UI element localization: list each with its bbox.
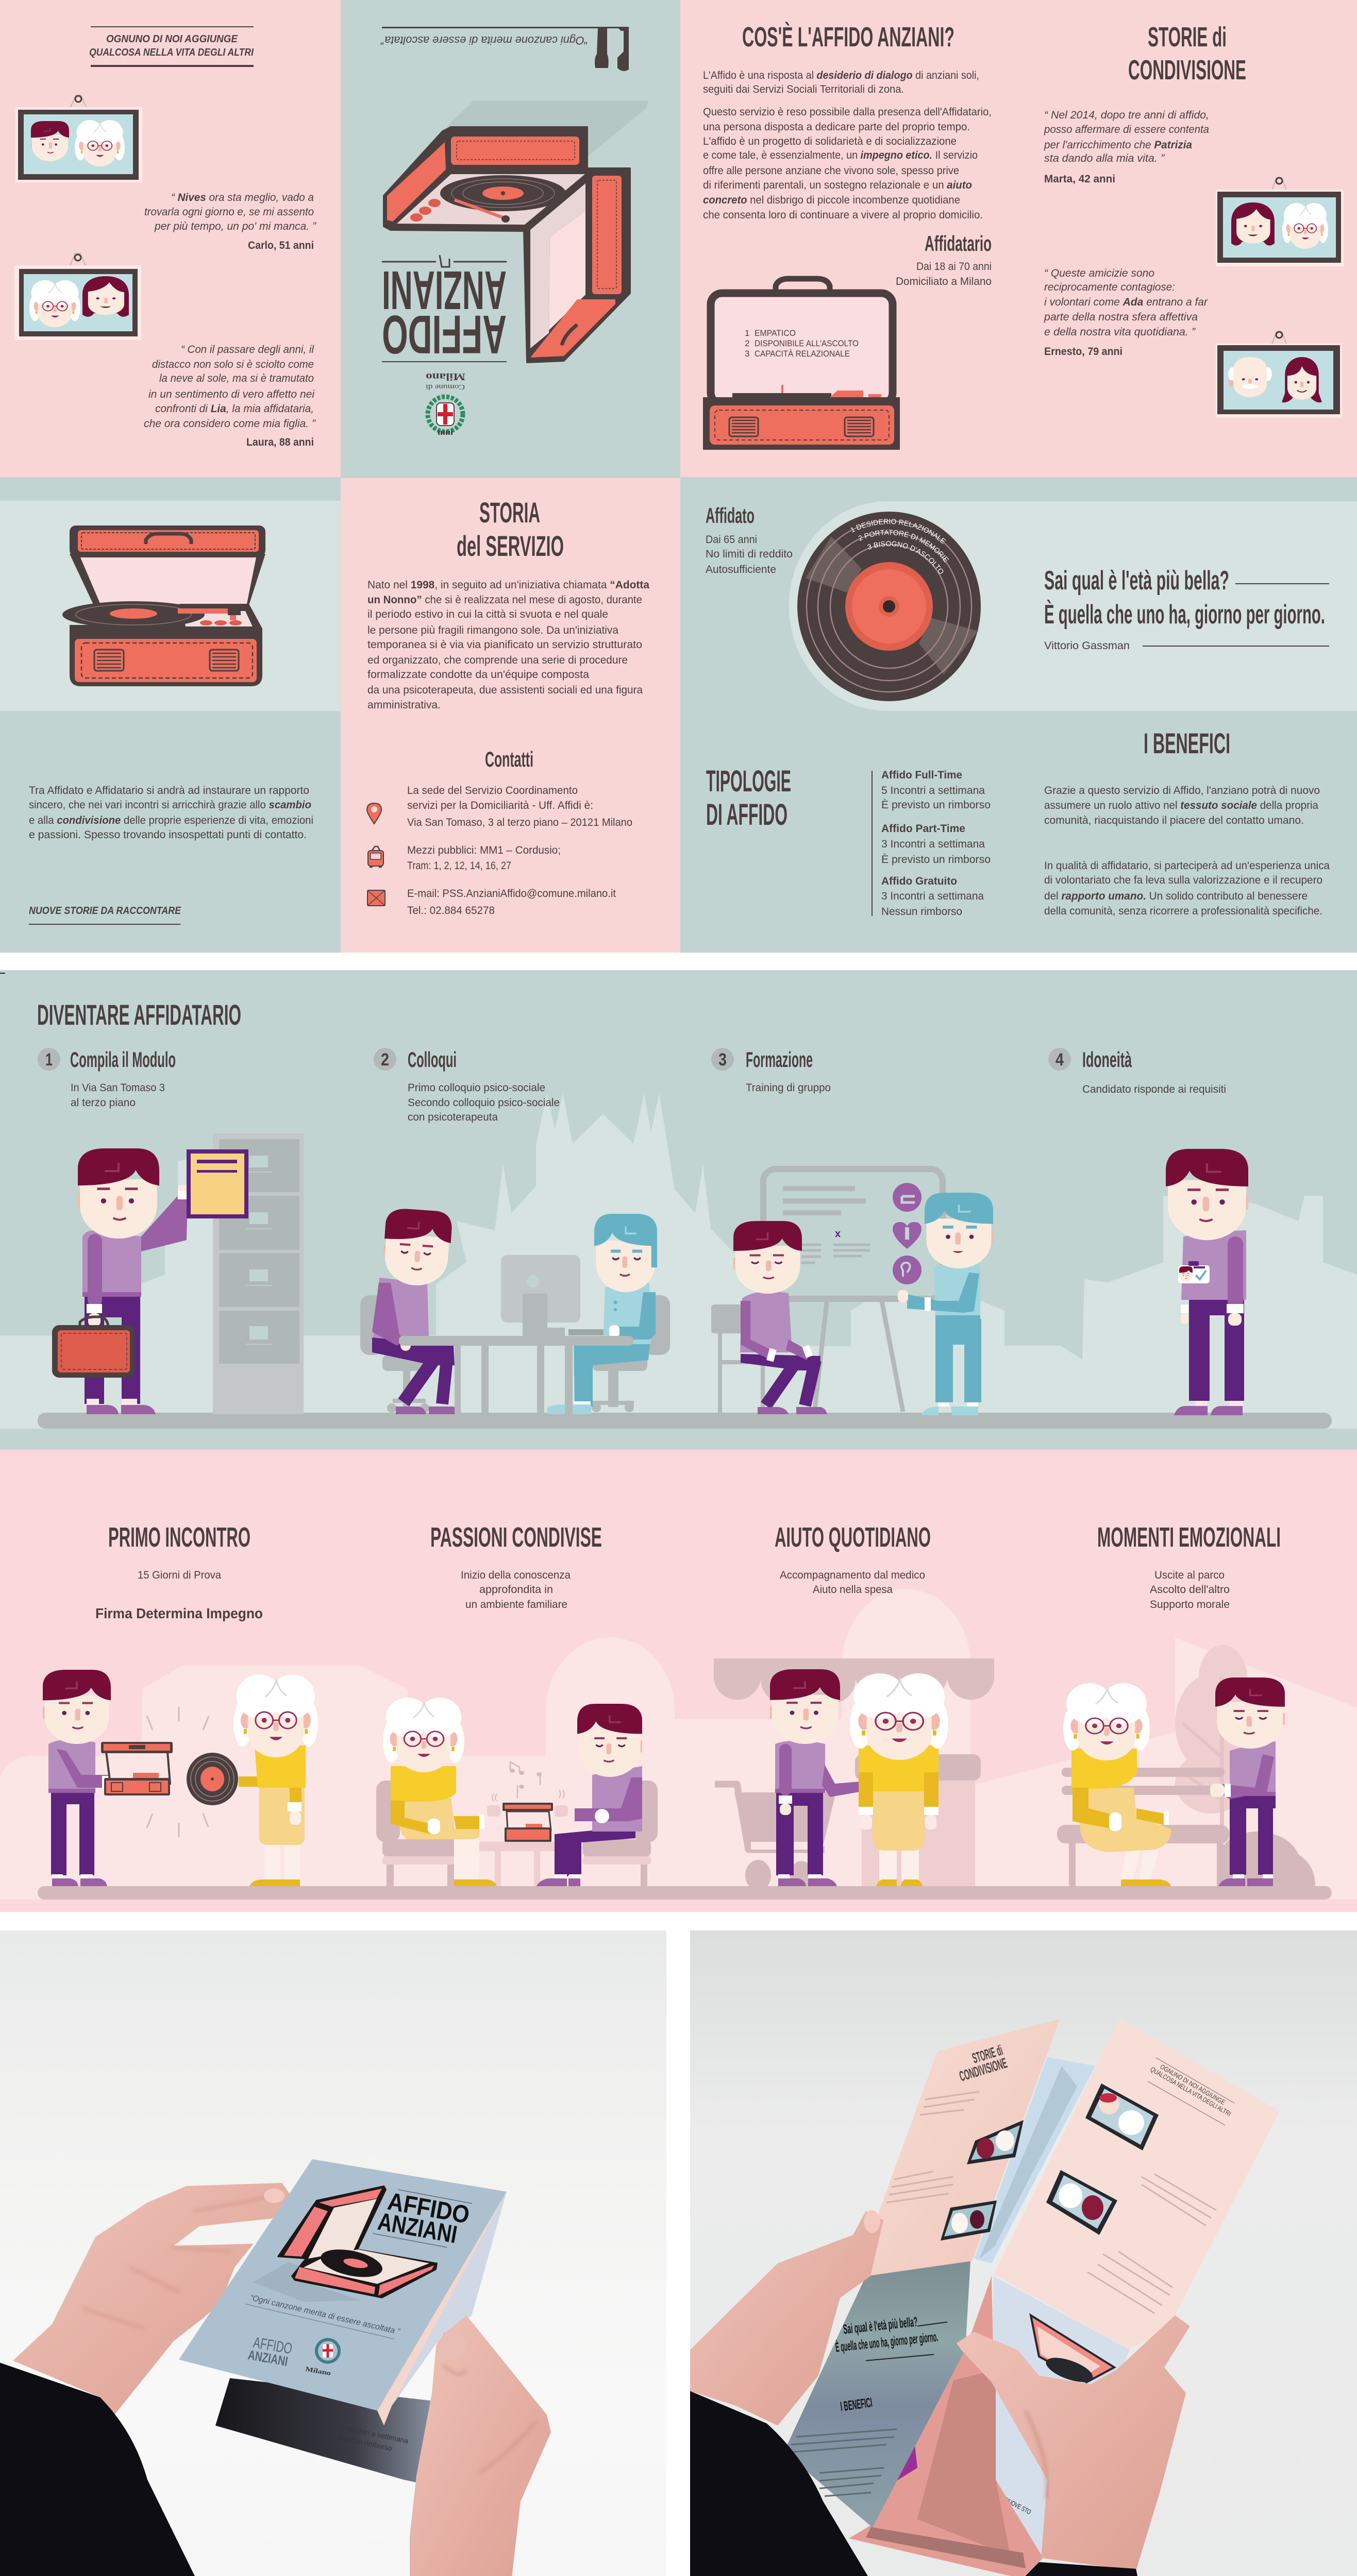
step 1 label — [38, 1047, 176, 1109]
figure on page — [876, 2421, 917, 2494]
block: affidato: Dai 65 anni — [706, 534, 757, 546]
cover shadow — [253, 2262, 361, 2302]
brochure right page — [994, 2019, 1280, 2349]
heading: ognuno di noi: OGNUNO DI NOI AGGIUNGE — [106, 33, 238, 45]
panel: abbinamento scenes — [0, 1450, 1357, 1912]
step 4 label: Idoneità — [1082, 1047, 1132, 1072]
cover logos: Milano — [305, 2365, 331, 2377]
text block: definition: L'Affido è una risposta al desiderio di dialogo di anziani soli, — [703, 70, 979, 81]
panel: row two right — [680, 479, 1357, 953]
text block: definition — [703, 70, 992, 221]
filing cabinet — [213, 1133, 304, 1414]
panel: testimonials left — [0, 0, 341, 477]
quote: Gassman: Vittorio Gassman — [1044, 640, 1130, 652]
icon: heart — [893, 1222, 922, 1249]
step 1 label: Compila il Modulo — [70, 1047, 176, 1072]
cover title: AFFIDO — [382, 304, 507, 365]
cover logos — [247, 2334, 339, 2377]
heading: cos'è: COS'È L'AFFIDO ANZIANI? — [742, 22, 954, 53]
text block: rapporto: e passioni. Spesso trovando insospettati punti di contatto. — [29, 829, 307, 841]
burst lines — [147, 1707, 209, 1837]
table top — [399, 1336, 633, 1414]
cover title: ANZIANI — [382, 260, 507, 320]
step 2 label: Primo colloquio psico-sociale — [408, 1082, 545, 1094]
text block: definition: concreto nel disbrigo di piccole incombenze quotidiane — [703, 194, 960, 206]
figure: man with suitcase and form — [52, 1148, 246, 1414]
quote: Marta: posso affermare di essere contenta — [1044, 124, 1209, 135]
heading group: aiuto: AIUTO QUOTIDIANO — [775, 1522, 931, 1553]
contact: address: servizi per la Domiciliarità - Uff. Affidi è: — [407, 800, 593, 811]
ground band on pink page — [866, 2527, 1026, 2568]
lower right bluish page — [987, 2276, 1130, 2558]
text block: benefici: Grazie a questo servizio di Affido, l'anziano potrà di nuovo — [1044, 785, 1320, 796]
text block: benefici: comunità, riacquistando il piacere del contatto umano. — [1044, 815, 1304, 826]
text block: definition: una persona disposta a dedicare parte del proprio tempo. — [703, 121, 970, 133]
step 2 label: 2 — [381, 1050, 389, 1070]
step 4 label: Candidato risponde ai requisiti — [1082, 1083, 1226, 1095]
panel: cover — [341, 0, 680, 477]
armchair left — [376, 1781, 460, 1886]
text block: history: formalizzate condotte da un'équipe composta — [367, 669, 589, 681]
list: types of affido: 5 Incontri a settimana — [881, 785, 985, 796]
quote: Laura: la neve al sole, ma si è tramutato — [159, 372, 314, 384]
text block: rapporto — [29, 785, 313, 841]
heading: benefici: I BENEFICI — [1144, 727, 1230, 759]
quote: Ernesto: i volontari come Ada entrano a far — [1044, 296, 1208, 308]
armchair right — [582, 1781, 658, 1886]
quote: Ernesto: parte della nostra sfera affettiva — [1044, 311, 1198, 323]
cover logos: ANZIANI — [247, 2347, 289, 2369]
quote: Marta — [1044, 109, 1209, 185]
photo: open brochure in hands: I BENEFICI — [840, 2395, 873, 2414]
heading: storia: STORIA — [479, 496, 540, 529]
heading: tipologie: TIPOLOGIE — [706, 765, 791, 798]
cover title: ANZIANI — [376, 2208, 459, 2249]
text block: history: un Nonno” che si è realizzata nel mese di agosto, durante — [367, 594, 642, 606]
right page heading: OGNUNO DI NOI AGGIUNGE — [1159, 2063, 1227, 2106]
quote: Laura: distacco non solo si è sciolto come — [152, 359, 314, 370]
counter — [855, 1754, 981, 1781]
quote: Ernesto: “ Queste amicizie sono — [1044, 267, 1154, 279]
heading: storie: CONDIVISIONE — [1128, 55, 1246, 86]
right hand — [957, 2315, 1190, 2571]
heading: ognuno di noi: QUALCOSA NELLA VITA DEGLI ALTRI — [89, 47, 254, 58]
heading group: passioni: PASSIONI CONDIVISE — [430, 1522, 602, 1553]
icon: cable plug — [595, 28, 629, 71]
shopping cart — [715, 1784, 836, 1891]
portrait frame: woman and old woman — [1216, 178, 1344, 266]
open record player illustration — [62, 526, 265, 686]
logo: Comune di Milano: Milano — [426, 371, 465, 382]
text block: benefici: di volontariato che fa leva sulla valorizzazione e il recupero — [1044, 874, 1322, 886]
text block: history — [367, 579, 649, 711]
step 4 label: 4 — [1056, 1050, 1064, 1070]
quote: Laura: Laura, 88 anni — [246, 436, 314, 448]
quote: Nives: Carlo, 51 anni — [248, 240, 314, 251]
heading: storie — [1128, 22, 1246, 86]
sleeves — [690, 2391, 1142, 2576]
ground — [38, 1886, 1332, 1900]
left hand — [690, 2210, 883, 2426]
text block: rapporto: Tra Affidato e Affidatario si andrà ad instaurare un rapporto — [29, 785, 309, 796]
block: affidatario: Dai 18 ai 70 anni — [916, 261, 992, 273]
heading group: passioni — [430, 1522, 602, 1611]
icon: tram — [368, 846, 383, 867]
right page frames — [1046, 2083, 1159, 2235]
left page heading: STORIE di — [970, 2042, 1004, 2066]
figure: old woman seated — [383, 1698, 497, 1886]
whiteboard — [763, 1169, 943, 1413]
list: requirements: CAPACITÀ RELAZIONALE — [755, 349, 850, 359]
contact: transport: Tram: 1, 2, 12, 14, 16, 27 — [407, 860, 511, 872]
quote: Marta: sta dando alla mia vita. ” — [1044, 152, 1165, 164]
quote: Laura: confronti di Lia, la mia affidataria, — [155, 403, 314, 415]
heading group: passioni: approfondita in — [479, 1584, 553, 1596]
left page heading — [958, 2042, 1009, 2084]
heading: storia: del SERVIZIO — [457, 530, 564, 562]
left hand — [13, 2183, 290, 2417]
park bench — [1057, 1768, 1229, 1886]
portrait frame: man and old woman — [15, 95, 142, 182]
quote: Laura: che ora considero come mia figlia. ” — [144, 418, 316, 430]
heading: tipologie: DI AFFIDO — [706, 798, 788, 832]
heading: ognuno di noi — [89, 26, 254, 67]
lower tagline fragment: NUOVE STO — [1004, 2496, 1032, 2516]
chair right — [592, 1295, 670, 1412]
figure: approved candidate with badge — [1166, 1149, 1250, 1415]
figure: candidate seated at table — [372, 1207, 460, 1414]
separator strip — [0, 477, 1357, 479]
bush — [1220, 1832, 1315, 1886]
scene: primo incontro — [41, 1670, 318, 1886]
shop column — [862, 1778, 975, 1886]
scene: passioni condivise — [376, 1698, 658, 1886]
teal fold text lines — [789, 2429, 897, 2496]
contact: transport — [407, 844, 561, 872]
tree — [1175, 1645, 1247, 1832]
right page text lines — [1087, 2174, 1216, 2313]
text block: rapporto: sincero, che nei vari incontri si arricchirà grazie allo scambio — [29, 799, 311, 811]
lower record player — [1031, 2315, 1114, 2387]
heading group: passioni: Inizio della conoscenza — [461, 1569, 571, 1581]
step 3 label — [711, 1047, 831, 1094]
block: affidatario: Domiciliato a Milano — [896, 276, 992, 287]
sleeve — [0, 2363, 204, 2576]
cover quote upside down: “Ogni canzone merita di essere ascoltata” — [380, 34, 588, 47]
list: types of affido: 3 Incontri a settimana — [881, 838, 985, 850]
step 2 label — [374, 1047, 560, 1123]
mini record player 2 — [502, 1803, 553, 1842]
text block: definition: L'affido è un progetto di solidarietà e di socializzazione — [703, 135, 957, 147]
quote: Nives — [144, 192, 316, 251]
text block: benefici: del rapporto umano. Un solido contributo al benessere — [1044, 890, 1308, 902]
step 1 label: al terzo piano — [71, 1097, 136, 1109]
contact: address — [407, 785, 632, 828]
quote: Ernesto: Ernesto, 79 anni — [1044, 346, 1123, 358]
heading: storia — [457, 496, 564, 562]
text block: definition: Questo servizio è reso possibile dalla presenza dell'Affidatario, — [703, 106, 992, 118]
figure: old woman standing — [233, 1674, 318, 1886]
heading group: aiuto: Aiuto nella spesa — [813, 1584, 893, 1596]
awning — [714, 1658, 994, 1703]
list: types of affido: È previsto un rimborso — [881, 799, 991, 811]
list: types of affido: Affido Part-Time — [881, 823, 965, 835]
text block: benefici: In qualità di affidatario, si parteciperà ad un'esperienza unica — [1044, 860, 1330, 872]
panel: row two left — [0, 478, 341, 953]
scene: momenti emozionali — [1057, 1645, 1315, 1886]
brochure cover — [179, 2159, 507, 2411]
step 4 label — [1048, 1047, 1226, 1095]
heading group: momenti: Uscite al parco — [1154, 1569, 1225, 1581]
step 3 label: Training di gruppo — [746, 1082, 831, 1094]
left page text lines — [886, 2092, 979, 2202]
background silhouettes — [0, 1589, 1357, 1900]
quote: Marta: “ Nel 2014, dopo tre anni di affido, — [1044, 109, 1209, 121]
step 3 label: 3 — [718, 1050, 727, 1070]
list: requirements: DISPONIBILE ALL'ASCOLTO — [755, 338, 859, 348]
text block: benefici: assumere un ruolo attivo nel tessuto sociale della propria — [1044, 800, 1318, 811]
heading group: passioni: un ambiente familiare — [465, 1599, 567, 1611]
step 1 label: 1 — [45, 1050, 53, 1070]
quote: Ernesto — [1044, 267, 1208, 358]
panel: storia del servizio — [341, 478, 680, 953]
icon: at sign — [893, 1183, 922, 1212]
quote: Marta: per l'arricchimento che Patrizia — [1044, 139, 1192, 151]
text block: rapporto: e alla condivisione delle proprie esperienze di vita, emozioni — [29, 815, 313, 826]
block: affidato — [706, 503, 793, 575]
quote: Nives: trovarla ogni giorno e, se mi assento — [144, 206, 314, 218]
list: types of affido: Affido Full-Time — [881, 769, 962, 781]
quote: Ernesto: e della nostra vita quotidiana. ” — [1044, 326, 1196, 338]
text block: definition: seguiti dai Servizi Sociali Territoriali di zona. — [703, 83, 904, 95]
figure: seated trainee — [732, 1221, 827, 1414]
step 1 label: In Via San Tomaso 3 — [71, 1082, 165, 1094]
step 2 label: Secondo colloquio psico-sociale — [408, 1097, 560, 1109]
cover quote upside down — [380, 27, 629, 47]
contact: transport: Mezzi pubblici: MM1 – Cordusio; — [407, 844, 561, 856]
contact: email: E-mail: PSS.AnzianiAffido@comune.milano.it — [407, 888, 616, 900]
list: requirements: EMPATICO — [755, 328, 796, 338]
text block: definition: che consenta loro di continuare a vivere al proprio domicilio. — [703, 209, 983, 221]
brochure centre fold — [974, 2057, 1095, 2263]
mini record player — [101, 1742, 173, 1795]
block: affidatario — [896, 231, 992, 287]
chair at whiteboard — [711, 1304, 765, 1413]
quote: Nives: per più tempo, un po' mi manca. ” — [154, 221, 316, 232]
heading group: primo incontro: PRIMO INCONTRO — [108, 1522, 250, 1553]
figure: man seated — [537, 1704, 644, 1886]
panel: diventare affidatario — [0, 970, 1357, 1450]
cover title — [373, 2188, 472, 2249]
heading group: aiuto — [775, 1522, 931, 1596]
text block: history: da una psicoterapeuta, due assistenti sociali ed una figura — [367, 684, 643, 696]
left teal fold — [784, 2261, 970, 2528]
contact: email: Tel.: 02.884 65278 — [407, 905, 495, 917]
icon: ear — [893, 1256, 922, 1284]
text block: definition: e come tale, è essenzialmente, un impegno etico. Il servizio — [703, 149, 978, 161]
lower pink page — [849, 2276, 1043, 2576]
panel: what is affido — [680, 0, 1357, 477]
heading group: momenti — [1097, 1522, 1281, 1611]
text block: history: Nato nel 1998, in seguito ad un'iniziativa chiamata “Adotta — [367, 579, 649, 591]
cover logos: AFFIDO — [252, 2334, 293, 2358]
heading group: primo incontro: Firma Determina Impegno — [95, 1605, 263, 1621]
text block: history: ed organizzato, che comprende una serie di procedure — [367, 654, 628, 666]
ground — [38, 1413, 1332, 1429]
record player illustration — [384, 127, 630, 362]
teal fold quote — [834, 2314, 947, 2361]
vinyl curved text 3: 3 BISOGNO D'ASCOLTO — [867, 541, 943, 574]
photo: open brochure in hands: È quella che uno ha, giorno per giorno. — [834, 2329, 939, 2355]
teal fold quote: Sai qual è l'età più bella? — [842, 2314, 918, 2337]
figure: man with player — [41, 1670, 116, 1886]
brochure inner text: 3 Incontri a settimana — [340, 2422, 409, 2445]
text block: definition: offre alle persone anziane che vivono sole, spesso prive — [703, 165, 959, 177]
monitor and table — [501, 1255, 610, 1336]
vinyl curved text: 1 DESIDERIO RELAZIONALE — [850, 519, 946, 544]
quote: Nives: “ Nives ora sta meglio, vado a — [171, 192, 314, 204]
form paper — [189, 1151, 246, 1216]
vinyl record with labels — [797, 512, 981, 701]
list: types of affido — [872, 769, 991, 918]
pink fold edge — [377, 2192, 507, 2426]
quote: Marta: Marta, 42 anni — [1044, 173, 1115, 185]
cover record player — [278, 2186, 437, 2298]
list: types of affido: È previsto un rimborso — [881, 854, 991, 866]
quote: Laura: “ Con il passare degli anni, il — [181, 344, 314, 355]
contact: address: La sede del Servizio Coordinamento — [407, 785, 578, 796]
block: affidato: Affidato — [706, 503, 755, 528]
text block: benefici: della comunità, senza ricorrere a professionalità specifiche. — [1044, 905, 1322, 917]
brochure back sheet — [215, 2315, 466, 2488]
heading: diventare: DIVENTARE AFFIDATARIO — [37, 998, 241, 1031]
logo: Comune di Milano: Comune di — [426, 383, 465, 391]
left page frames — [941, 2120, 1024, 2241]
chair left — [360, 1295, 434, 1413]
contact: email — [407, 888, 616, 917]
badge — [1178, 1261, 1210, 1283]
quote: Laura: in un sentimento di vero affetto nei — [148, 388, 315, 400]
whiteboard: x — [835, 1228, 841, 1240]
step 3 label: Formazione — [746, 1047, 813, 1072]
heading group: aiuto: Accompagnamento dal medico — [780, 1569, 925, 1581]
block: affidatario: Affidatario — [925, 231, 992, 256]
list: requirements: 2 — [745, 338, 749, 348]
text block: history: amministrativa. — [367, 699, 441, 711]
text block: history: le persone più fragili rimangono sole. Da un'iniziativa — [367, 624, 618, 636]
block: affidato: No limiti di reddito — [706, 548, 793, 560]
list: requirements: 3 — [745, 349, 749, 359]
list: types of affido: Affido Gratuito — [881, 875, 957, 887]
contact: address: Via San Tomaso, 3 al terzo piano – 20121 Milano — [407, 817, 632, 828]
photo: open brochure in hands — [690, 1930, 1357, 2576]
figure: old woman standing — [850, 1673, 948, 1886]
table with cups — [479, 1762, 568, 1886]
heading group: primo incontro — [95, 1522, 263, 1621]
text block: definition: di riferimenti parentali, un sostegno relazionale e un aiuto — [703, 179, 972, 191]
quote: Laura — [144, 344, 316, 448]
quote: Gassman — [1044, 566, 1329, 652]
cover title: AFFIDO — [386, 2188, 472, 2229]
list: requirements — [745, 328, 859, 359]
text block: history: il periodo estivo in cui la città si svuota e nel quale — [367, 608, 608, 620]
heading: contatti: Contatti — [485, 747, 533, 771]
heading group: primo incontro: 15 Giorni di Prova — [138, 1569, 221, 1581]
scene: aiuto quotidiano — [714, 1658, 994, 1891]
brochure inner text: Nessun rimborso — [338, 2433, 393, 2452]
figure: trainer — [898, 1193, 995, 1415]
record player with requirements — [703, 279, 900, 450]
figure: old woman on bench — [1063, 1683, 1171, 1886]
text block: benefici — [1044, 785, 1330, 917]
right page heading: QUALCOSA NELLA VITA DEGLI ALTRI — [1149, 2065, 1232, 2118]
tagline: NUOVE STORIE DA RACCONTARE — [29, 905, 181, 917]
figure: man standing — [1210, 1677, 1287, 1886]
heading: storie: STORIE di — [1148, 22, 1227, 53]
quote: Gassman: Sai qual è l'età più bella? — [1044, 566, 1229, 596]
heading group: momenti: Ascolto dell'altro — [1150, 1584, 1230, 1596]
photo: closed brochure in hands — [0, 1930, 666, 2576]
portrait frame: old man and woman — [1216, 332, 1342, 418]
list: requirements: 1 — [745, 328, 749, 338]
photo: open brochure in hands: CONDIVISIONE — [958, 2055, 1009, 2084]
logo: Comune di Milano — [426, 371, 465, 433]
cover quote: “Ogni canzone merita di essere ascoltata ” — [249, 2293, 401, 2336]
right page heading — [1148, 2058, 1234, 2125]
figure: psychologist at table — [547, 1214, 659, 1414]
list: types of affido: 3 Incontri a settimana — [881, 890, 984, 902]
city silhouette background — [0, 1093, 1357, 1429]
vinyl curved text 2: 2 PORTATORE DI MEMORIE — [859, 530, 949, 563]
step 2 label: Colloqui — [408, 1047, 457, 1072]
brochure left page — [868, 2019, 1060, 2276]
right hand — [410, 2315, 551, 2576]
cover title — [382, 255, 507, 365]
text block: history: temporanea si è via via pianificato un servizio strutturato — [367, 639, 642, 651]
block: affidato: Autosufficiente — [706, 564, 776, 575]
vinyl record small — [187, 1753, 238, 1805]
record player shadow — [447, 101, 648, 162]
quote: Ernesto: reciprocamente contagiose: — [1044, 281, 1175, 293]
icon: mail — [367, 890, 385, 906]
list: types of affido: Nessun rimborso — [881, 906, 962, 918]
icon: map pin — [367, 803, 381, 824]
figure: man assisting — [768, 1669, 860, 1886]
step 2 label: con psicoterapeuta — [408, 1111, 498, 1123]
heading: tipologie — [706, 765, 791, 832]
heading group: momenti: Supporto morale — [1150, 1599, 1230, 1611]
portrait frame: old woman and woman — [14, 253, 141, 340]
